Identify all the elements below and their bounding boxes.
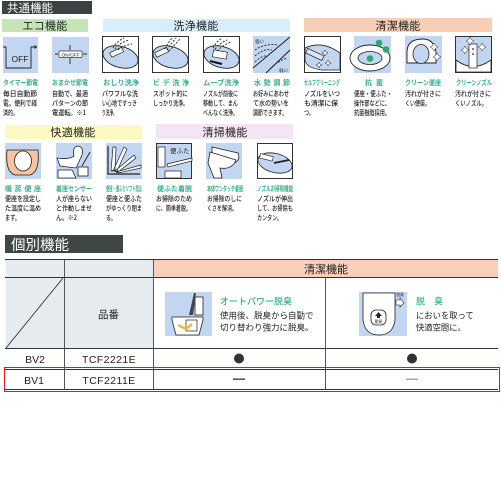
text: slow close: る。: [106, 213, 116, 223]
text: antibacterial: 抗菌樹脂採用。: [354, 108, 390, 118]
text: bidet wash: しっかり洗浄。: [153, 98, 188, 108]
text: slow close: 便座と便ふた: [106, 194, 142, 204]
text: seat sensor: と作動しませ: [56, 204, 92, 214]
text: antibacterial: 操作部などに、: [354, 98, 390, 108]
text: heated seat: [5, 184, 41, 223]
panel: comfort features: 快適機能: [50, 124, 96, 140]
icon: clean nozzle: [456, 36, 492, 72]
heading: individual features: [5, 234, 123, 255]
icon: slow close: [106, 143, 142, 179]
text: deodorizer: [416, 294, 474, 334]
icon: on off auto: ON/OFF: [61, 52, 80, 58]
text: auto saving: おまかせ節電: [52, 78, 88, 88]
heading: common features: 共通機能: [7, 0, 53, 16]
row: BV2: [25, 354, 417, 366]
text: nozzle cleaning: ノズルが伸出: [257, 194, 293, 204]
heading: individual features: 個別機能: [11, 234, 69, 255]
icon: water pressure: [253, 36, 290, 74]
text: antibacterial: [354, 78, 392, 118]
text: bidet wash: [153, 78, 189, 108]
panel: eco features: エコ機能: [22, 18, 68, 34]
row: BV2: TCF2221E: [82, 354, 136, 366]
icon: self cleaning: [304, 36, 340, 72]
text: antibacterial: 便座・便ふた・: [354, 89, 392, 99]
icon: moving wash: [201, 36, 242, 72]
icon: deodorizer: 脱臭: [375, 319, 382, 325]
diagonal cell: [6, 278, 63, 348]
text: rear wash: おしり洗浄: [103, 78, 139, 88]
text: one touch removal: [207, 184, 243, 214]
text: rear wash: い心地ですっき: [102, 98, 137, 108]
highlight: red box around BV1: [4, 368, 500, 392]
text: seat sensor: 着座センサー: [56, 184, 92, 194]
text: seat sensor: 人が座らない: [56, 194, 92, 204]
icon: one touch removal: [206, 143, 242, 179]
text: one touch removal: くさを解消。: [207, 204, 237, 214]
text: rear wash: り洗浄。: [102, 108, 117, 118]
text: auto saving: 自動で、最適: [52, 89, 88, 99]
text: moving wash: ノズルが前後に: [203, 89, 238, 99]
icon: deodorizer: 脱臭: [396, 292, 404, 298]
text: nozzle cleaning: ノズルお掃除機能: [257, 184, 293, 194]
row: BV1: BV1: [24, 375, 44, 387]
text: bidet wash: ビデ洗浄: [153, 78, 189, 88]
text: heated seat: 暖房便座: [5, 184, 41, 194]
text: self cleaning: セルフクリーニング: [304, 78, 340, 88]
panel: cleaning features: 清掃機能: [202, 124, 248, 140]
row: BV1: TCF2211E: [82, 375, 136, 387]
text: clean seat: クリーン便座: [405, 78, 441, 88]
icon: removable lid: 便ふた: [170, 145, 190, 155]
text: rear wash: [102, 78, 139, 118]
text: nozzle cleaning: カンタン。: [257, 213, 282, 223]
text: water pressure: お好みにあわせ: [253, 89, 289, 99]
panel: hygiene features: [304, 18, 492, 118]
row: BV2: BV2: [25, 354, 45, 366]
text: timer saving: 毎日自動節: [3, 89, 37, 99]
row: BV1: [24, 375, 418, 387]
text: clean nozzle: [455, 78, 492, 108]
text: clean seat: [405, 78, 441, 108]
text: heated seat: た温度に温め: [5, 204, 41, 214]
text: clean seat: 汚れが付きに: [405, 89, 441, 99]
text: slow close: [106, 184, 142, 223]
text: deodorizer: 快適空間に。: [416, 322, 466, 334]
panel: eco features: [2, 18, 89, 118]
text: timer saving: 電。便利で経: [3, 98, 37, 108]
text: water pressure: 水勢調節: [254, 78, 290, 88]
text: rear wash: パワフルな洗: [102, 89, 138, 99]
text: one touch removal: 本体ワンタッチ着脱: [207, 184, 243, 194]
icon: water pressure: 強い: [255, 38, 264, 45]
text: self cleaning: [304, 78, 340, 118]
text: auto saving: パターンの節: [52, 98, 88, 108]
panel: hygiene features: 清潔機能: [375, 18, 421, 34]
text: self cleaning: ノズルをいつ: [304, 89, 340, 99]
text: clean nozzle: くいノズル。: [455, 98, 487, 108]
text: one touch removal: お掃除のしに: [207, 194, 242, 204]
text: self cleaning: も清潔に保: [304, 98, 338, 108]
text: seat sensor: ん。※2: [56, 213, 77, 223]
text: water pressure: て水の勢いを: [253, 98, 289, 108]
panel: washing features: 洗浄機能: [173, 18, 219, 34]
text: seat sensor: [56, 184, 92, 223]
text: auto power deodorizer: オートパワー脱臭: [220, 294, 292, 308]
text: moving wash: 移動して、まん: [203, 98, 238, 108]
text: bidet wash: スポット的に: [153, 89, 188, 99]
text: auto power deodorizer: [220, 294, 314, 334]
text: auto saving: [52, 78, 88, 118]
icon: clean seat: [405, 36, 442, 73]
text: heated seat: 便座を設定し: [5, 194, 41, 204]
text: auto power deodorizer: 切り替わり強力に脱臭。: [220, 322, 314, 334]
text: auto power deodorizer: 使用後、脱臭から自動で: [220, 310, 314, 322]
text: timer saving: [3, 78, 38, 118]
text: self cleaning: つ。: [304, 108, 314, 118]
text: auto saving: 電運転。※1: [52, 108, 86, 118]
panel: individual features table: [5, 260, 498, 390]
label: model number: 品番: [98, 307, 119, 322]
icon: antibacterial: [350, 36, 391, 73]
text: removable lid: に、簡単着脱。: [156, 204, 191, 214]
text: moving wash: べんなく洗浄。: [203, 108, 238, 118]
text: removable lid: [156, 184, 192, 214]
icon: timer off: OFF: [12, 54, 28, 64]
text: moving wash: [203, 78, 239, 118]
text: deodorizer: 脱 臭: [416, 294, 443, 308]
icon: nozzle cleaning: [256, 144, 294, 178]
text: timer saving: タイマー節電: [3, 78, 38, 88]
text: clean nozzle: 汚れが付きに: [455, 89, 491, 99]
heading: common features: [2, 0, 92, 16]
text: water pressure: [253, 78, 290, 118]
icon: deodorizer: [359, 292, 407, 336]
icon: auto power deodorizer: [165, 292, 212, 336]
icon: bidet wash: [150, 36, 191, 72]
text: nozzle cleaning: して、お掃除も: [257, 204, 293, 214]
icon: heated seat: [5, 143, 41, 179]
heading: hygiene column: 清潔機能: [304, 261, 348, 277]
text: water pressure: 調節できます。: [253, 108, 287, 118]
text: slow close: がゆっくり閉ま: [106, 204, 142, 214]
text: removable lid: お掃除のため: [156, 194, 192, 204]
text: removable lid: 便ふた着脱: [157, 184, 192, 194]
icon: seat sensor: [56, 143, 92, 179]
panel: comfort features: [5, 124, 142, 223]
text: deodorizer: においを取って: [416, 310, 474, 322]
text: nozzle cleaning: [257, 184, 293, 223]
panel: washing features: [100, 18, 290, 118]
text: timer saving: 済的。: [3, 108, 18, 118]
panel: cleaning features: [156, 124, 294, 223]
text: moving wash: ムーブ洗浄: [203, 78, 239, 88]
icon: rear wash: [100, 36, 141, 72]
text: 便座・便ふたソフト閉止: [106, 184, 142, 194]
text: heated seat: ます。: [5, 213, 20, 223]
text: antibacterial: 抗菌: [365, 78, 383, 88]
icon: water pressure: 弱い: [279, 68, 288, 74]
text: clean seat: くい便座。: [405, 98, 430, 108]
